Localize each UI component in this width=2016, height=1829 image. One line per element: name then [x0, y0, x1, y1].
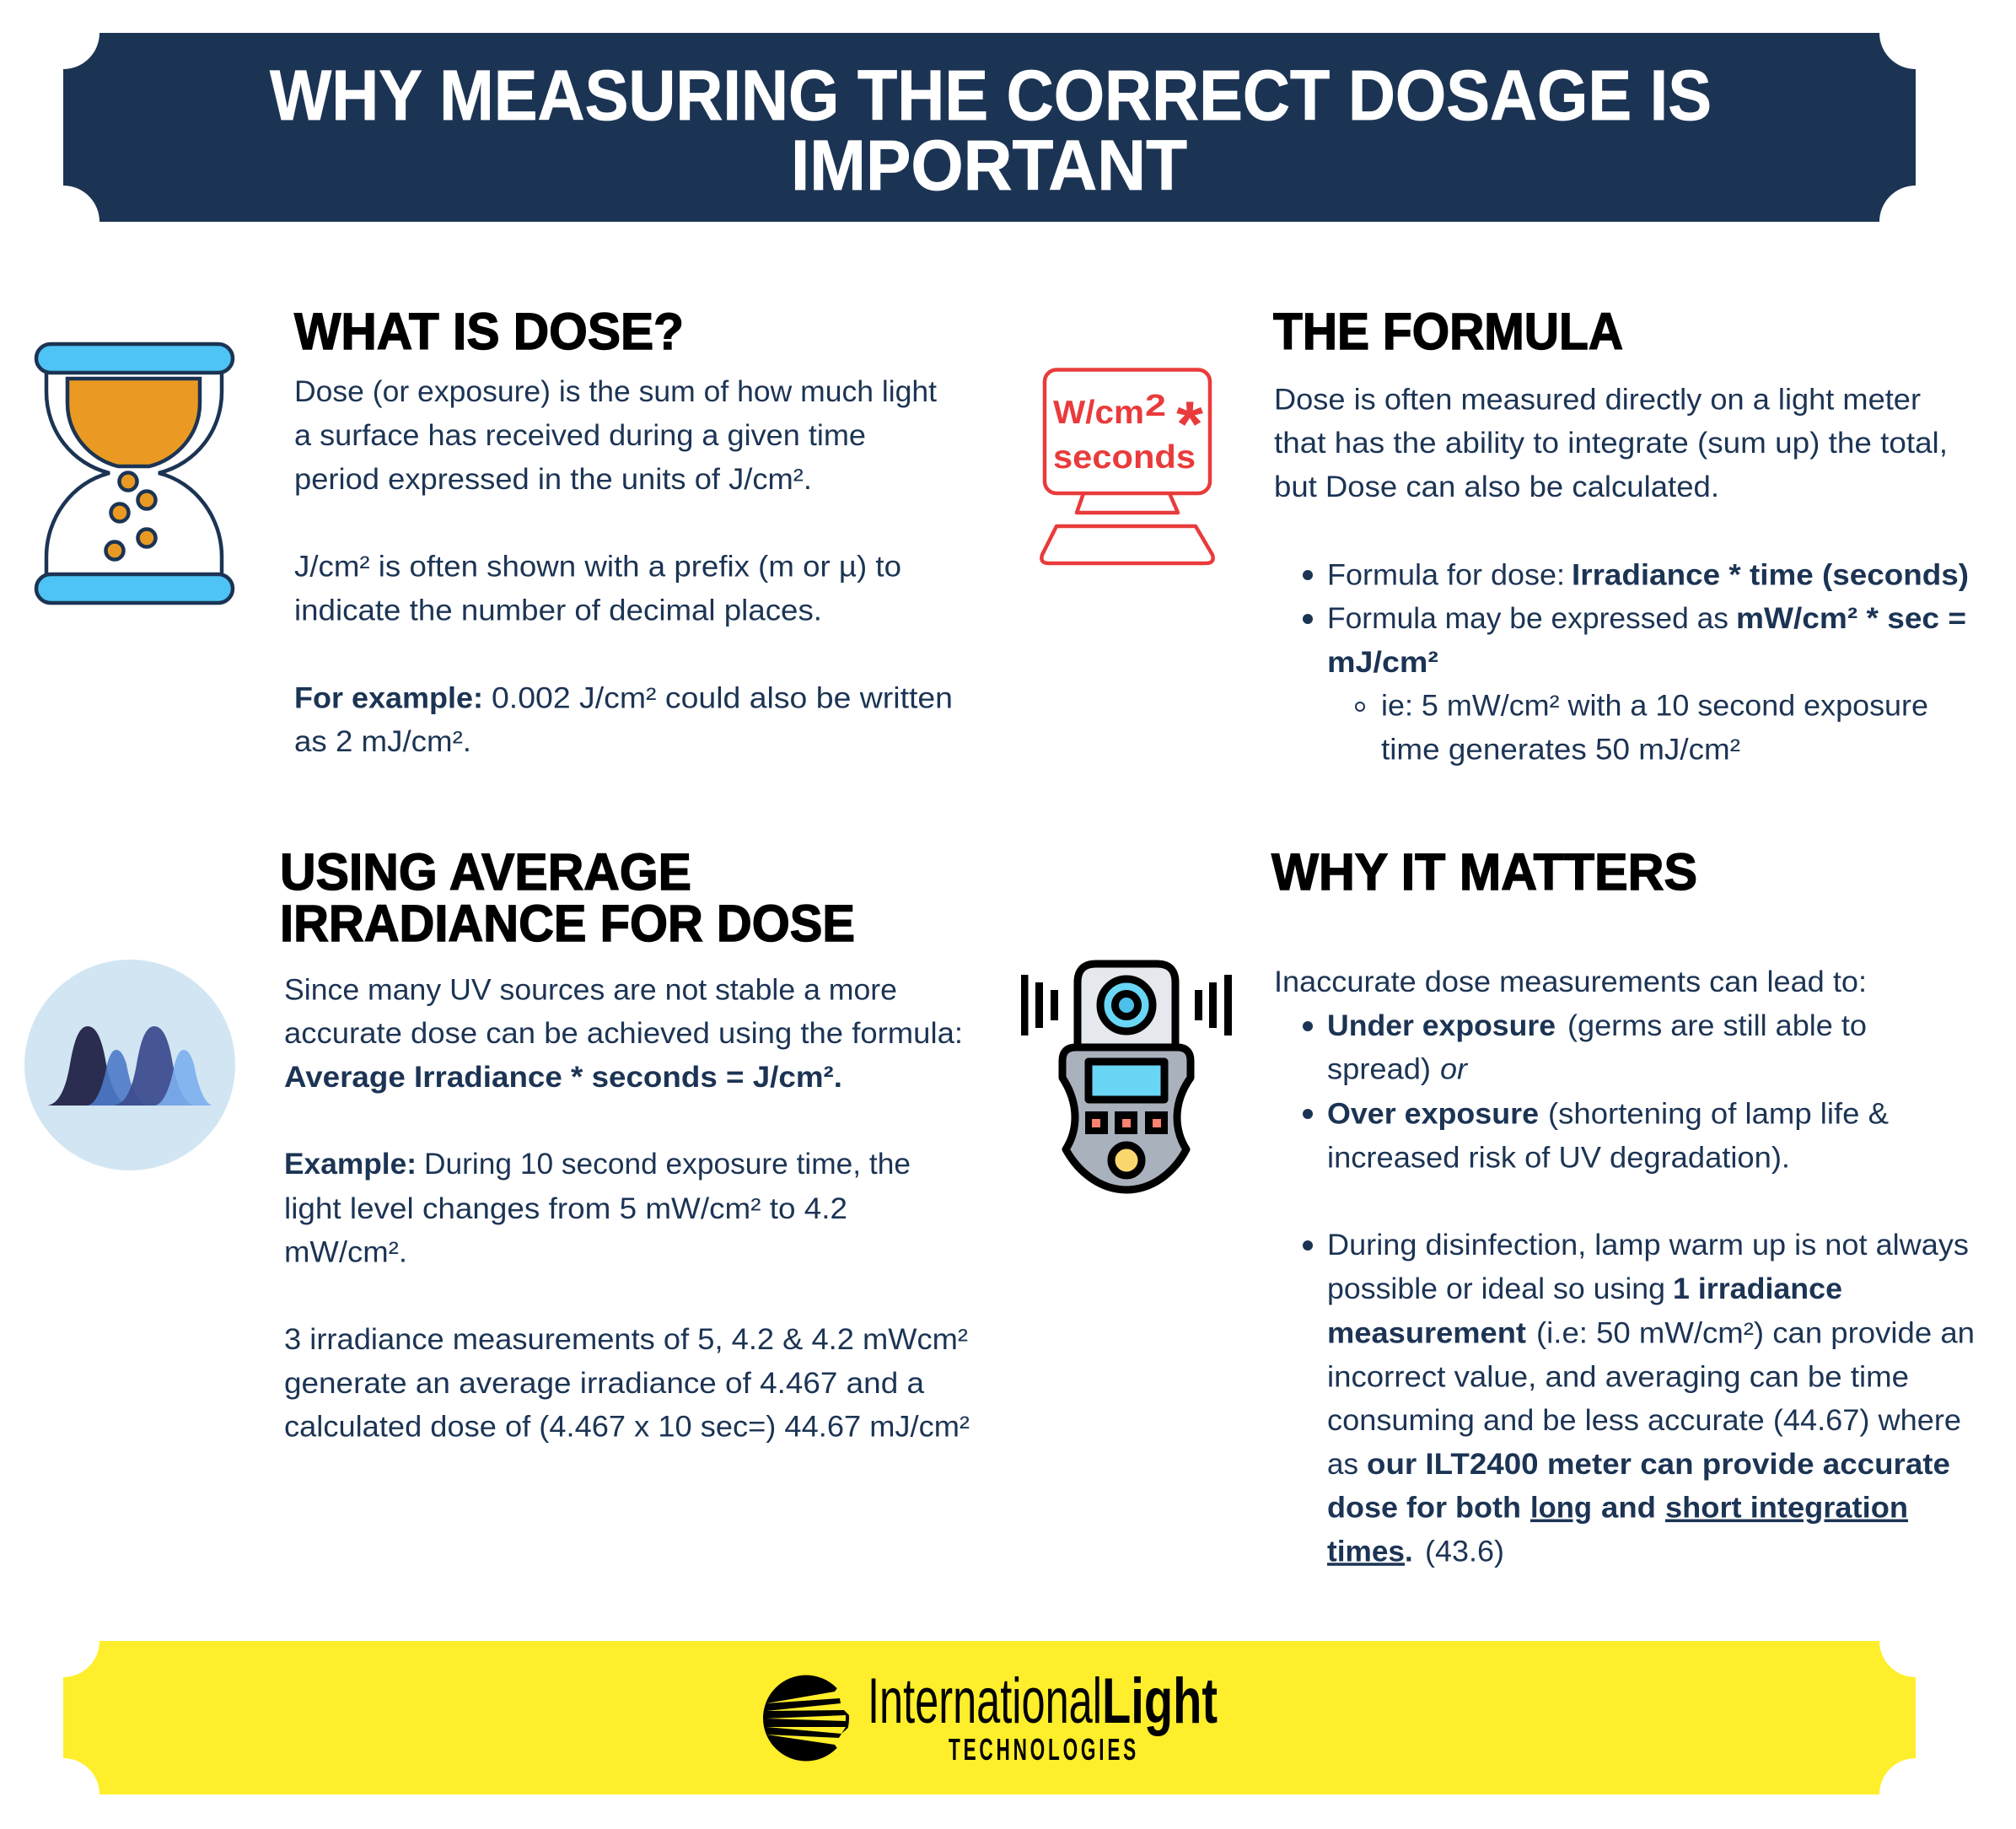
icon: computer with formula: * [1176, 389, 1203, 460]
icon: bell curves in circle [24, 960, 235, 1170]
text block: ILT2400 accuracy: During disinfection, lamp warm up is not always [1327, 1229, 1969, 1261]
icon: computer with formula: seconds [1053, 439, 1196, 476]
text block: formula intro: but Dose can also be calculated. [1274, 471, 1719, 503]
text block: dose definition: as 2 mJ/cm². [294, 725, 471, 758]
text block: dose definition: J/cm² is often shown with a prefix (m or µ) to [294, 551, 901, 584]
logo: International Light Technologies: International [868, 1665, 1102, 1737]
text block: ILT2400 accuracy: (43.6) [1425, 1535, 1504, 1568]
bullet list: formula expressions: Formula may be expressed as [1327, 602, 1728, 635]
bullet list: formula expressions: mJ/cm² [1327, 646, 1438, 679]
text block: calculated dose: generate an average irradiance of 4.467 and a [284, 1367, 925, 1400]
heading: using average irradiance for dose: USING AVERAGE [280, 843, 691, 901]
logo: International Light Technologies: TECHNOLOGIES [949, 1732, 1139, 1767]
panel: the formula [1273, 303, 1969, 766]
text block: ILT2400 accuracy: dose for both [1327, 1492, 1521, 1525]
text block: consequences: (shortening of lamp life & [1548, 1098, 1889, 1130]
icon: light meter [1021, 964, 1232, 1190]
text block: ILT2400 accuracy: . [1405, 1535, 1413, 1568]
text block: example: mW/cm². [284, 1236, 407, 1269]
text block: dose definition: a surface has received during a given time [294, 419, 866, 452]
icon: computer with formula [1041, 369, 1213, 563]
heading: what is dose: WHAT IS DOSE? [294, 303, 684, 360]
text block: average irradiance formula: accurate dose can be achieved using the formula: [284, 1017, 963, 1050]
bullet list: formula expressions: time generates 50 mJ/cm² [1381, 733, 1740, 766]
text block: example [284, 1148, 911, 1269]
text block: dose definition: 0.002 J/cm² could also be written [492, 681, 953, 714]
text block: consequences: Inaccurate dose measurements can lead to: [1274, 966, 1867, 998]
text block: ILT2400 accuracy: (i.e: 50 mW/cm²) can provide an [1536, 1317, 1975, 1349]
text block: ILT2400 accuracy: consuming and be less accurate (44.67) where [1327, 1404, 1961, 1437]
panel: what is dose [294, 303, 953, 758]
logo: International Light Technologies [763, 1665, 1218, 1767]
icon: computer with formula: W/cm [1053, 395, 1144, 431]
text block: example: During 10 second exposure time, the [424, 1148, 911, 1181]
title [270, 56, 1712, 205]
bullet list: formula expressions: Irradiance * time (seconds) [1572, 558, 1969, 591]
bullet list: formula expressions [1303, 558, 1969, 766]
text block: consequences: Over exposure [1327, 1098, 1539, 1130]
text block: dose definition: For example: [294, 681, 483, 714]
text block: consequences: (germs are still able to [1567, 1009, 1867, 1042]
text block: ILT2400 accuracy: incorrect value, and averaging can be time [1327, 1360, 1909, 1393]
text block: consequences [1274, 966, 1889, 1174]
text block: dose definition [294, 375, 953, 758]
text block: formula intro: that has the ability to integrate (sum up) the total, [1274, 427, 1948, 460]
text block: calculated dose: 3 irradiance measurements of 5, 4.2 & 4.2 mWcm² [284, 1323, 968, 1356]
heading: why it matters: WHY IT MATTERS [1271, 843, 1697, 901]
text block: ILT2400 accuracy: times [1327, 1535, 1405, 1568]
text block: ILT2400 accuracy: and [1601, 1492, 1656, 1525]
text block: consequences: Under exposure [1327, 1009, 1556, 1042]
text block: dose definition: indicate the number of decimal places. [294, 594, 822, 627]
title: IMPORTANT [791, 126, 1187, 205]
text block: calculated dose: calculated dose of (4.467 x 10 sec=) 44.67 mJ/cm² [284, 1411, 970, 1444]
text block: example: light level changes from 5 mW/cm² to 4.2 [284, 1192, 847, 1225]
text block: dose definition: Dose (or exposure) is the sum of how much light [294, 375, 937, 408]
footer banner [63, 1641, 1916, 1794]
text block: ILT2400 accuracy [1303, 1229, 1975, 1568]
title: WHY MEASURING THE CORRECT DOSAGE IS [270, 56, 1712, 135]
text block: ILT2400 accuracy: long [1530, 1492, 1592, 1525]
text block: ILT2400 accuracy: as [1327, 1448, 1358, 1481]
text block: average irradiance formula: Average Irradiance * seconds = J/cm². [284, 1061, 842, 1094]
heading: using average irradiance for dose [280, 843, 855, 952]
panel: why it matters [1271, 843, 1975, 1568]
logo: International Light Technologies: Light [1102, 1665, 1218, 1737]
text block: dose definition: period expressed in the units of J/cm². [294, 463, 812, 496]
text block: consequences: increased risk of UV degradation). [1327, 1141, 1790, 1174]
text block: ILT2400 accuracy: 1 irradiance [1673, 1272, 1842, 1305]
text block: average irradiance formula [284, 973, 963, 1094]
bullet list: formula expressions: Formula for dose: [1327, 558, 1565, 591]
text block: formula intro: Dose is often measured directly on a light meter [1274, 383, 1921, 417]
heading: the formula: THE FORMULA [1273, 303, 1623, 360]
text block: calculated dose [284, 1323, 970, 1444]
text block: ILT2400 accuracy: possible or ideal so using [1327, 1272, 1665, 1305]
text block: formula intro [1274, 383, 1948, 503]
text block: average irradiance formula: Since many UV sources are not stable a more [284, 973, 897, 1006]
bullet list: formula expressions: ie: 5 mW/cm² with a 10 second exposure [1381, 690, 1928, 723]
text block: consequences: spread) [1327, 1053, 1431, 1086]
text block: consequences: or [1440, 1053, 1468, 1086]
heading: using average irradiance for dose: IRRADIANCE FOR DOSE [280, 895, 855, 952]
text block: ILT2400 accuracy: our ILT2400 meter can provide accurate [1367, 1448, 1950, 1481]
icon: computer with formula: 2 [1145, 388, 1166, 422]
icon: hourglass [36, 344, 233, 603]
text block: ILT2400 accuracy: short integration [1665, 1492, 1908, 1525]
text block: ILT2400 accuracy: measurement [1327, 1317, 1526, 1349]
text block: example: Example: [284, 1148, 417, 1181]
header banner [63, 33, 1916, 222]
panel: using average irradiance [280, 843, 970, 1444]
bullet list: formula expressions: mW/cm² * sec = [1736, 602, 1966, 635]
